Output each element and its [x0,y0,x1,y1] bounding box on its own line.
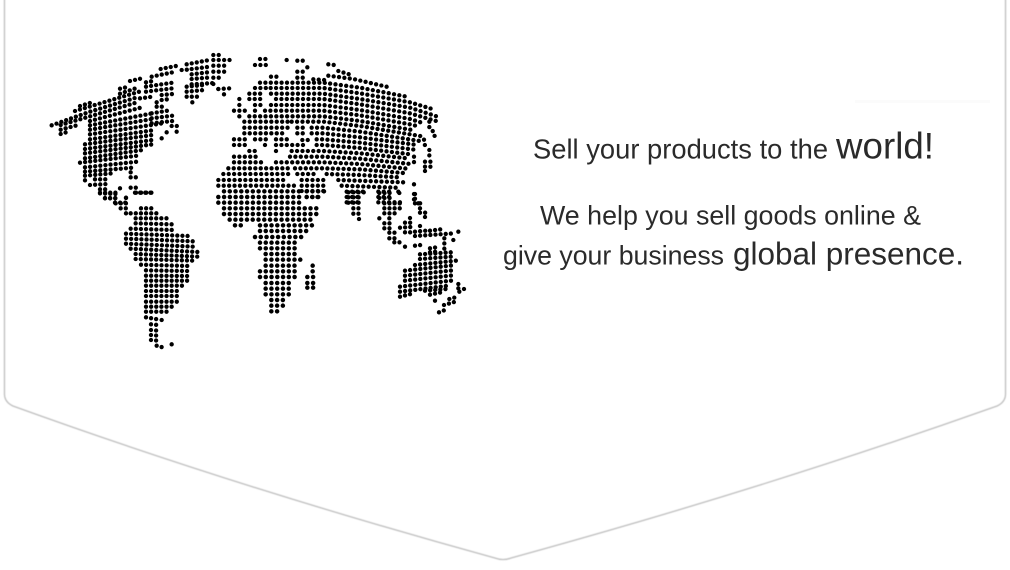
map: Canadian islands [120,66,178,138]
map: Greenland west [182,60,218,102]
map: South America and Central America [100,193,199,347]
map: North America [52,60,218,203]
map: Eurasia and north Africa [213,55,441,203]
heading: sell to the world: Sell your products to the [533,134,828,164]
world map [52,55,464,347]
faint top-right highlight [855,100,990,103]
map: Africa [100,191,325,347]
text emphasis: global presence: global presence. [733,236,964,272]
text line: give your business: give your business [503,240,724,270]
map: India, South-East Asia and Australia [348,192,464,312]
heading emphasis: world!: world! [835,126,934,166]
text line: we help you sell goods online: We help you sell goods online & [540,200,921,230]
